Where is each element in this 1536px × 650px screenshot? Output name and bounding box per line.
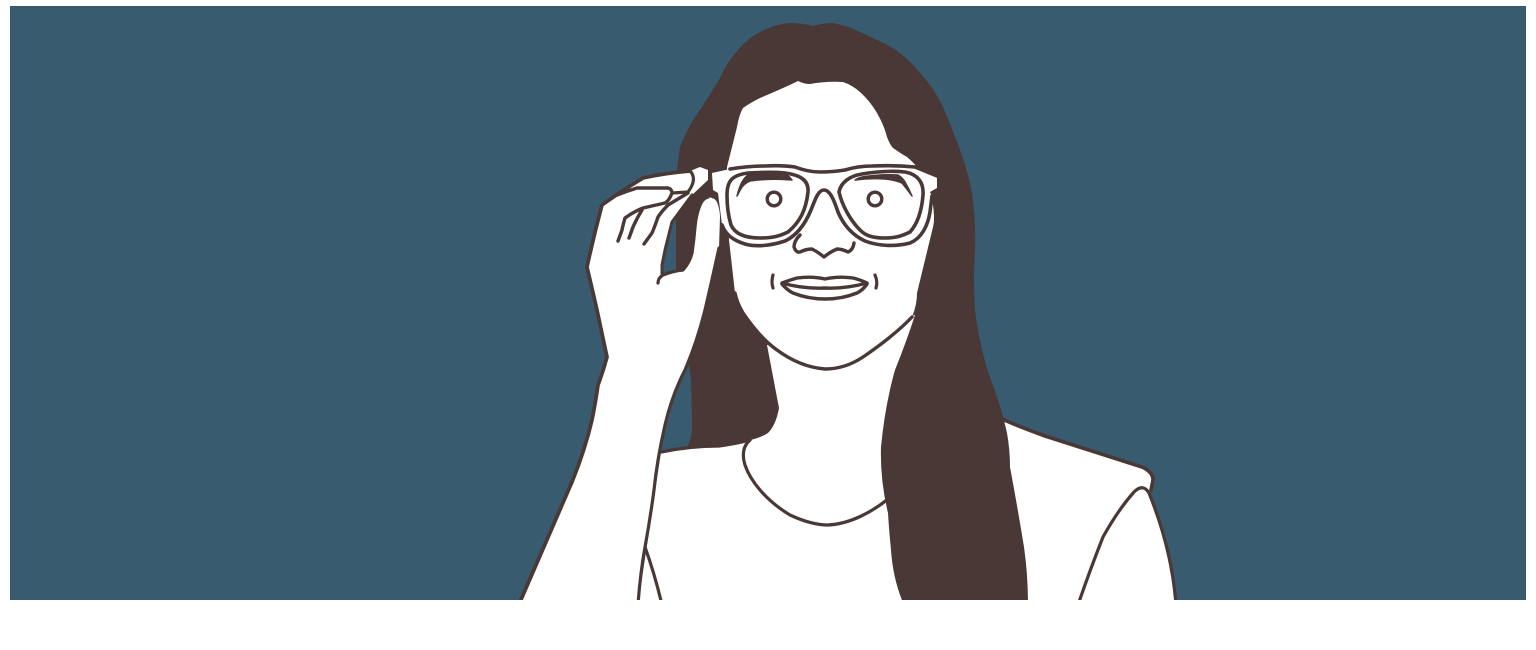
right eye (868, 192, 882, 206)
middle finger (629, 210, 642, 238)
right dimple (875, 275, 877, 288)
body and neck (640, 315, 1155, 600)
left dimple (772, 275, 773, 288)
left eyebrow (737, 174, 792, 196)
right lens (839, 171, 923, 238)
fingertip nail (672, 172, 693, 193)
neckline (743, 440, 888, 525)
hand palm edge (662, 195, 692, 274)
mouth (782, 277, 867, 299)
right eyebrow (855, 175, 912, 196)
left lens (727, 172, 808, 238)
left eye (767, 192, 781, 206)
hair (676, 23, 1028, 605)
hand and arm (520, 167, 720, 605)
sleeve (1079, 488, 1176, 605)
figure (520, 23, 1176, 605)
glasses (712, 166, 937, 246)
ring finger (644, 193, 688, 244)
index finger (617, 188, 672, 241)
arm fold line (645, 547, 662, 605)
face (727, 81, 934, 369)
nose (794, 235, 854, 257)
